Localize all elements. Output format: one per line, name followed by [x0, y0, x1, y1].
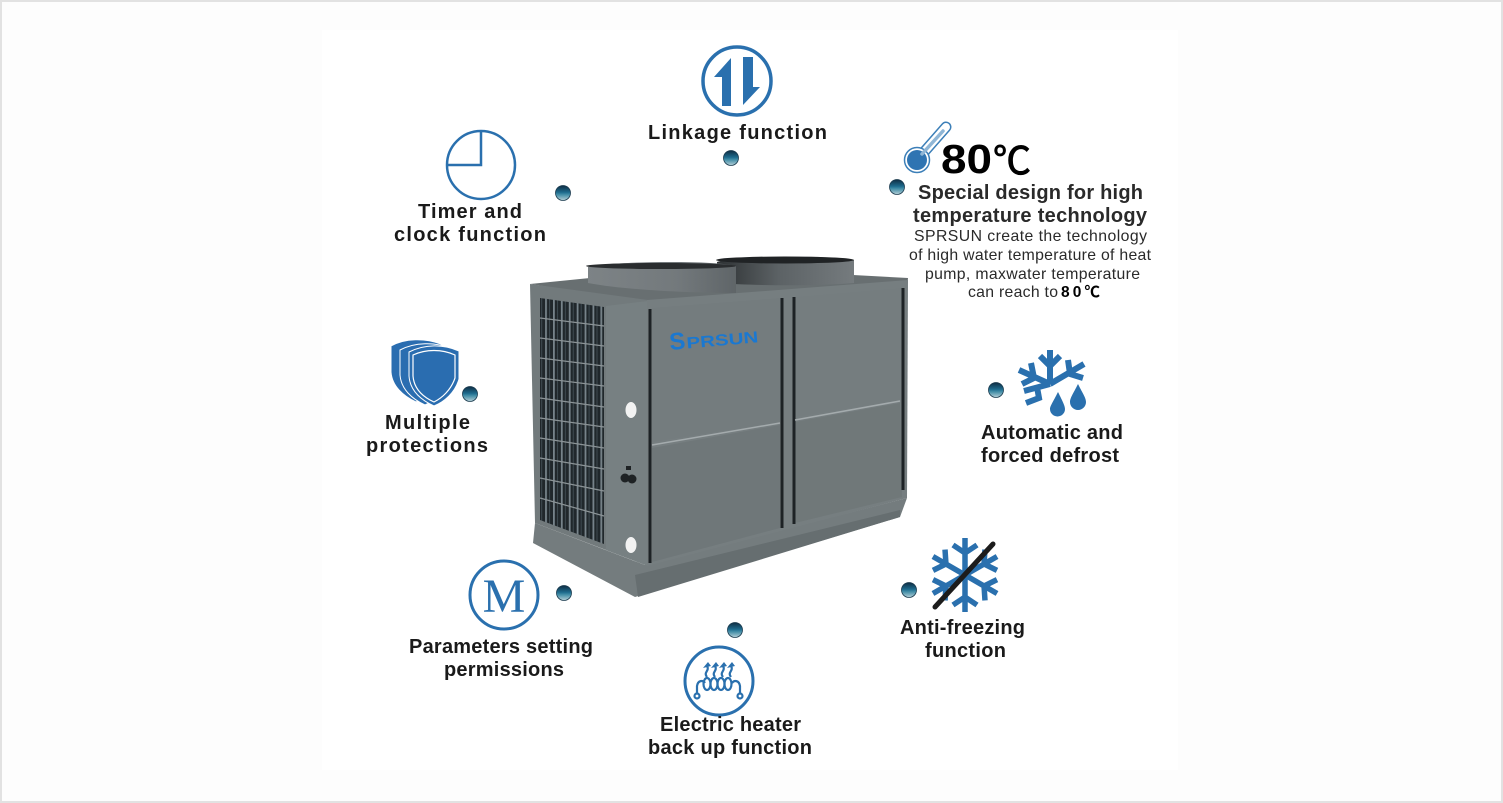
connector dot — [890, 180, 904, 194]
label: Linkage function — [648, 122, 827, 144]
connector dot — [724, 150, 738, 166]
description: pump, maxwater temperature — [925, 266, 1140, 283]
label: forced defrost — [981, 445, 1119, 467]
corner column — [606, 301, 648, 566]
label: back up function — [648, 737, 812, 759]
label: Electric heater — [660, 714, 801, 736]
connector dot — [462, 386, 478, 402]
front panels — [650, 288, 903, 563]
label: protections — [366, 435, 488, 457]
description: can reach to — [968, 284, 1058, 301]
description — [909, 228, 1152, 301]
feature: parameters setting permissions — [409, 561, 593, 681]
description: of high water temperature of heat — [909, 247, 1152, 264]
label: function — [925, 640, 1006, 662]
feature: multiple protections — [366, 340, 488, 457]
label — [981, 422, 1123, 467]
icon: M circle — [470, 561, 538, 629]
icon: shields — [391, 340, 459, 406]
label — [648, 714, 812, 759]
connector dot — [988, 382, 1004, 398]
heading: temperature technology — [913, 205, 1148, 227]
fin grille — [540, 298, 604, 544]
label: Anti-freezing — [900, 617, 1025, 639]
big temperature value — [941, 130, 1031, 185]
icon: clock — [447, 131, 515, 199]
connector dot — [556, 186, 570, 200]
base — [533, 498, 907, 597]
feature: anti-freezing function — [900, 538, 1025, 662]
heat pump unit — [530, 256, 908, 597]
description: SPRSUN create the technology — [914, 228, 1147, 245]
left side face — [530, 284, 648, 566]
heading: Special design for high — [918, 182, 1143, 204]
heading — [913, 182, 1148, 227]
label: Parameters setting — [409, 636, 593, 658]
label: clock function — [394, 224, 546, 246]
icon: crossed snowflake — [927, 538, 1003, 612]
label — [366, 412, 488, 457]
description: 80℃ — [1061, 284, 1100, 301]
water connections — [620, 402, 636, 553]
fan guards — [586, 256, 854, 293]
label — [409, 636, 593, 681]
icon: M circle: M — [483, 570, 525, 623]
label: permissions — [444, 659, 564, 681]
feature: linkage function — [648, 47, 827, 144]
big temperature value: ℃ — [993, 130, 1031, 185]
feature: high temperature — [904, 127, 1152, 301]
feature: timer and clock function — [394, 131, 546, 246]
connector dot — [728, 622, 742, 638]
feature: electric heater back up function — [648, 647, 812, 759]
label: Automatic and — [981, 422, 1123, 444]
label: Multiple — [385, 412, 470, 434]
big temperature value: 80 — [941, 136, 992, 182]
connector dot — [902, 582, 916, 598]
logo: SPRSUN: SPRSUN — [668, 321, 759, 356]
label — [900, 617, 1025, 662]
feature: automatic and forced defrost — [981, 350, 1123, 467]
icon: snowflake with drops — [1019, 350, 1086, 417]
front frame — [647, 280, 908, 566]
top plate — [530, 275, 908, 302]
label: Timer and — [418, 201, 522, 223]
label — [394, 201, 546, 246]
icon: thermometer — [904, 127, 946, 172]
icon: heating coil — [685, 647, 753, 715]
icon: linkage arrows — [703, 47, 771, 115]
connector dot — [556, 586, 572, 600]
